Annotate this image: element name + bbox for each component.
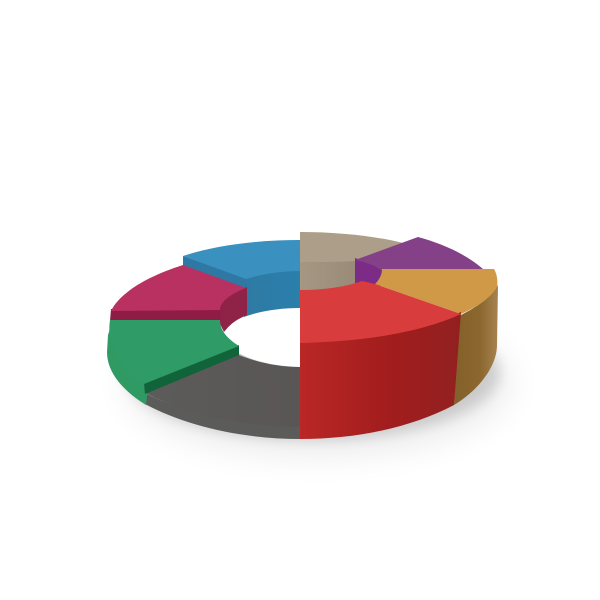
ground shadow (124, 304, 508, 452)
segment: tan (300, 232, 403, 296)
segment: orange (375, 269, 498, 405)
segment: blue (183, 240, 300, 317)
segment: grey (136, 352, 301, 439)
segment: purple (355, 237, 483, 290)
segment: red (300, 281, 461, 439)
inner hole backdrop (220, 289, 300, 367)
segment: magenta (110, 265, 247, 332)
segment: green (107, 320, 239, 405)
